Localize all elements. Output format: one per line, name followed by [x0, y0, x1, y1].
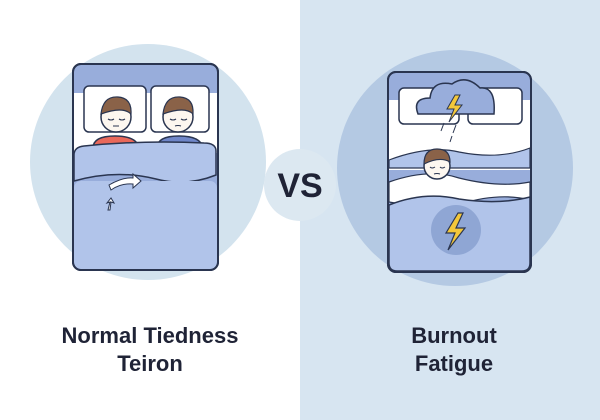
heading: normal tiredness: Teiron	[117, 351, 183, 376]
panel: burnout fatigue bed	[337, 50, 573, 286]
icon: VS badge: VS	[277, 167, 323, 205]
heading: burnout fatigue: Burnout	[411, 323, 497, 348]
icon: VS badge	[264, 149, 336, 221]
heading: normal tiredness: Normal Tiedness	[62, 323, 238, 348]
heading: burnout fatigue: Fatigue	[415, 351, 493, 376]
heading: normal tiredness	[62, 323, 238, 376]
right background panel	[300, 0, 600, 420]
heading: burnout fatigue	[411, 323, 497, 376]
panel: normal tiredness bed	[30, 44, 266, 280]
